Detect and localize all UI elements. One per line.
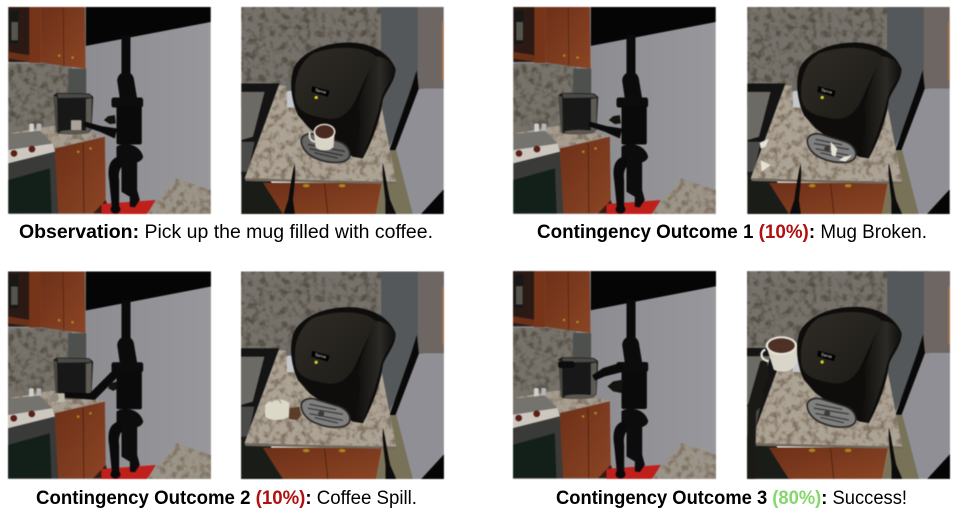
caption: contingency outcome 2: Contingency Outcome 2 (10%): Coffee Spill.	[36, 488, 417, 509]
robot arm holding mug	[747, 360, 769, 479]
mug with coffee	[309, 124, 336, 151]
image: robot lifting mug from machine	[513, 271, 716, 479]
panel: observation	[8, 7, 444, 214]
held mug with coffee	[762, 336, 797, 372]
image: close-up of broken mug shards	[747, 7, 950, 214]
panel: contingency outcome 3	[513, 271, 950, 479]
caption: observation: Observation: Pick up the mug filled with coffee.	[19, 222, 433, 243]
panel: contingency outcome 2	[8, 272, 444, 479]
tipped mug	[265, 399, 289, 420]
image: robot with broken mug at machine	[513, 7, 716, 214]
image: robot with mug knocked over	[8, 272, 211, 479]
caption: contingency outcome 1: Contingency Outcome 1 (10%): Mug Broken.	[537, 222, 927, 243]
image: robot at counter reaching for mug	[8, 7, 211, 214]
image: close-up of mug on coffee machine tray	[241, 7, 444, 214]
mug shards	[760, 138, 852, 172]
image: close-up of gripper holding full mug	[747, 271, 950, 479]
tipped mug	[51, 393, 65, 402]
coffee spill	[289, 407, 301, 420]
image: close-up of tipped mug and coffee spill	[241, 272, 444, 479]
panel: contingency outcome 1	[513, 7, 950, 214]
caption: contingency outcome 3: Contingency Outcome 3 (80%): Success!	[556, 488, 907, 509]
